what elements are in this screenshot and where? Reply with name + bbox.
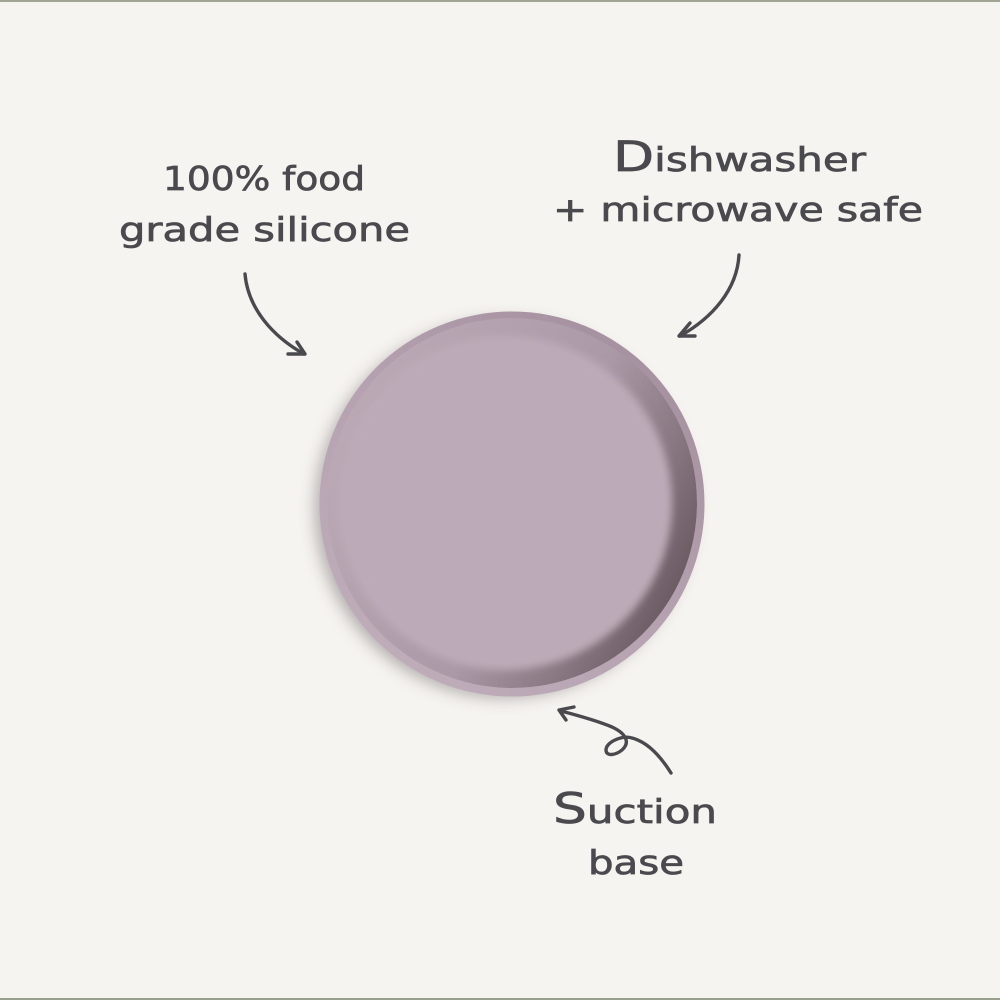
label: suction base bbox=[553, 784, 717, 882]
arrow: suction base to plate bbox=[559, 707, 671, 773]
label: dishwasher and microwave safe bbox=[553, 132, 923, 229]
label: dishwasher and microwave safe: D ishwasher bbox=[613, 132, 867, 181]
label: dishwasher and microwave safe: + microwave safe bbox=[553, 190, 923, 229]
label: suction base: base bbox=[588, 843, 684, 882]
arrow: dishwasher to plate bbox=[679, 255, 739, 336]
label: 100% food grade silicone bbox=[119, 159, 410, 249]
plate bbox=[315, 312, 704, 698]
label: 100% food grade silicone: grade silicone bbox=[119, 210, 410, 249]
arrow: silicone to plate bbox=[245, 274, 305, 354]
label: 100% food grade silicone: 100% food bbox=[163, 159, 365, 198]
label: suction base: Suction bbox=[553, 784, 717, 833]
